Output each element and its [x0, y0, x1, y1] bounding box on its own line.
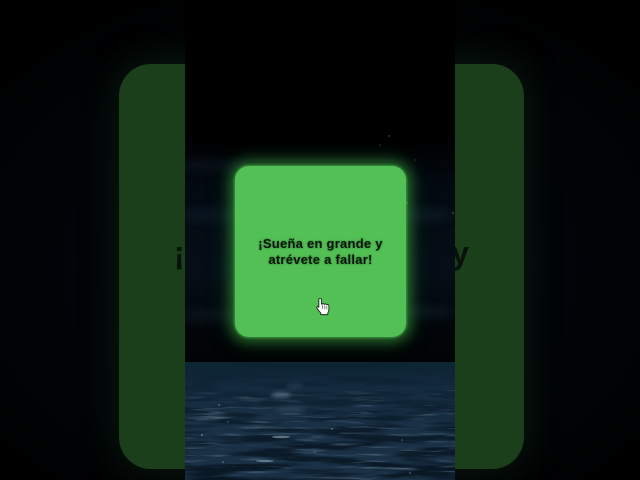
card message	[258, 236, 384, 266]
blurred enlarged card text: ¡Sueña en grande y	[174, 235, 469, 271]
moonlight reflections	[201, 383, 411, 474]
green card with glow	[235, 166, 406, 337]
icon: hand cursor	[316, 298, 330, 316]
central video scene: night sea	[185, 50, 455, 480]
card message: ¡Sueña en grande y	[258, 236, 383, 251]
card message: atrévete a fallar!	[268, 252, 373, 266]
blurred enlarged card	[119, 64, 524, 469]
night sky	[175, 0, 455, 363]
dark sea	[185, 362, 455, 480]
